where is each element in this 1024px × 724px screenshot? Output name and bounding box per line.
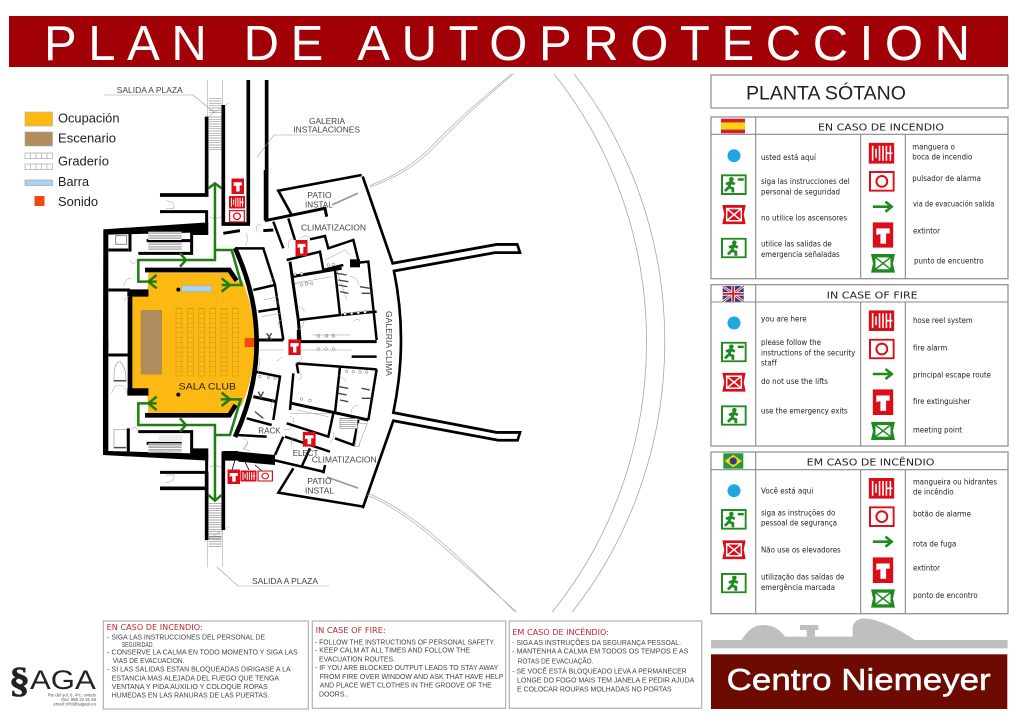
icon: hose reel <box>869 143 894 164</box>
panel: planta sótano: PLANTA SÓTANO <box>746 82 906 104</box>
icon: alarm <box>870 507 894 526</box>
label: patio instal south: PATIO <box>307 476 332 486</box>
body text: ESTANCIA MAS ALEJADA DEL FUEGO QUE TENGA <box>112 673 279 682</box>
body text: - FOLLOW THE INSTRUCTIONS OF PERSONAL SAFETY. <box>315 637 495 646</box>
body text: VENTANA Y PIDA AUXILIO Y COLOQUE ROPAS <box>112 682 268 691</box>
heading: IN CASE OF FIRE <box>827 290 918 301</box>
icon: meeting point <box>871 589 895 608</box>
icon: extinguisher <box>873 389 893 415</box>
body text: AND PLACE WET CLOTHES IN THE GROOVE OF THE <box>320 681 492 690</box>
west upper walls <box>103 80 273 350</box>
heading: EM CASO DE INCÊNDIO: <box>512 628 609 637</box>
stage <box>141 310 162 374</box>
fire equipment south <box>228 460 272 484</box>
auditorium: sala club <box>127 248 257 437</box>
legend text: de incêndio <box>913 488 954 497</box>
icon: meeting point <box>871 422 895 440</box>
legend text: extintor <box>913 563 941 572</box>
body text: - SIGA LAS INSTRUCCIONES DEL PERSONAL DE <box>107 633 265 642</box>
body text: ROTAS DE EVACUAÇÃO. <box>518 656 593 665</box>
legend text: punto de encuentro <box>914 256 984 265</box>
legend text: pessoal de segurança <box>761 519 837 528</box>
evacuation routes south <box>138 393 241 501</box>
body text <box>512 638 694 694</box>
legend text: instructions of the security <box>761 348 856 357</box>
arrowheads <box>148 183 230 292</box>
flag: uk <box>723 286 744 302</box>
fire equipment north <box>229 178 245 222</box>
label: climatizacion south: CLIMATIZACION <box>312 454 377 464</box>
logo: saga <box>9 660 97 707</box>
legend text: fire extinguisher <box>913 397 971 406</box>
legend text: siga as instruções do <box>761 508 836 517</box>
bar <box>182 286 212 292</box>
legend <box>25 112 120 209</box>
body text: SEGURIDAD. <box>122 640 154 649</box>
body text: FROM FIRE OVER WINDOW AND ASK THAT HAVE HELP <box>320 672 503 681</box>
icon: you are here <box>728 484 740 497</box>
logo: saga: tfno: 985 22 81 59 <box>61 697 97 702</box>
legend text: hose reel system <box>913 316 973 325</box>
extinguisher: north wing <box>296 240 308 256</box>
icon: hose reel <box>869 478 894 499</box>
legend text: principal escape route <box>913 370 991 379</box>
panel: english legend <box>711 285 1008 446</box>
west lower walls <box>103 340 275 567</box>
label: climatizacion north: CLIMATIZACION <box>301 223 366 233</box>
icon: niemeyer skyline <box>711 618 1008 648</box>
east lower rooms <box>237 330 377 507</box>
seating <box>176 308 238 376</box>
body text: EVACUATION ROUTES. <box>319 654 395 663</box>
label: galeria instalaciones: GALERIA <box>309 116 345 126</box>
icon: escape arrow <box>873 537 892 547</box>
evacuation routes north <box>138 183 242 292</box>
label: galeria instalaciones <box>293 116 360 135</box>
icon: meeting point <box>871 254 895 273</box>
legend text: manguera o <box>912 142 955 151</box>
legend text: usted está aquí <box>761 153 817 162</box>
panel: instructions english <box>312 621 506 708</box>
legend text <box>761 315 991 435</box>
occupied area <box>132 273 255 414</box>
body text: - SIGA AS INSTRUÇÕES DA SEGURANÇA PESSOAL. <box>512 638 681 647</box>
label: salida a plaza south: SALIDA A PLAZA <box>252 576 318 586</box>
body text: - CONSERVE LA CALMA EN TODO MOMENTO Y SIGA LAS <box>107 648 298 657</box>
heading: EN CASO DE INCENDIO: <box>107 623 203 632</box>
icon: escape arrow <box>873 202 892 212</box>
legend text: via de evacuación salida <box>913 200 994 209</box>
icon: security staff <box>722 175 746 194</box>
outer arcs <box>327 74 665 612</box>
legend text: use the emergency exits <box>761 407 848 416</box>
logo: centro niemeyer <box>711 654 1007 709</box>
logo: saga: email: info@sagaoi.eu <box>53 702 97 707</box>
legend text: personal de seguridad <box>761 187 840 196</box>
legend text: please follow the <box>761 338 821 347</box>
legend text: mangueira ou hidrantes <box>913 477 997 486</box>
heading: EN CASO DE INCENDIO <box>818 123 944 134</box>
legend text: extintor <box>913 226 941 235</box>
extinguisher: centre <box>288 339 301 355</box>
panel: planta sótano <box>711 75 1008 108</box>
icon: alarm <box>870 172 894 191</box>
body text: VIAS DE EVACUACION. <box>113 656 184 665</box>
legend text: staff <box>761 359 777 368</box>
legend text: emergencia señaladas <box>761 250 840 259</box>
label: sala club: SALA CLUB <box>179 381 236 392</box>
label: patio instal south: INSTAL <box>305 485 334 495</box>
flag: spain <box>721 119 745 133</box>
legend text: utilização das saídas de <box>761 573 845 582</box>
legend text <box>761 142 994 265</box>
logo: saga: AGA <box>30 665 96 695</box>
icon: emergency exit <box>722 574 746 592</box>
legend text: siga las instrucciones del <box>761 177 850 186</box>
icon: escape arrow <box>873 369 892 379</box>
legend text: Você está aqui <box>761 486 813 495</box>
icon: no lifts <box>722 540 746 559</box>
label: patio instal north: INSTAL <box>305 199 333 209</box>
legend text: fire alarm <box>913 343 947 352</box>
icon: you are here <box>728 149 740 162</box>
legend text: boca de incendio <box>912 153 973 162</box>
legend text: you are here <box>761 315 807 324</box>
icon: security staff <box>722 343 746 361</box>
body text <box>107 633 298 700</box>
legend text: meeting point <box>913 426 962 435</box>
icon: emergency exit <box>722 406 746 425</box>
body text: - SI LAS SALIDAS ESTAN BLOQUEADAS DIRIGASE A LA <box>107 665 291 674</box>
label: galeria instalaciones: INSTALACIONES <box>293 125 360 135</box>
legend: ocupación: Ocupación <box>58 112 120 126</box>
legend: sonido: Sonido <box>58 195 98 209</box>
legend: barra: Barra <box>58 175 89 189</box>
icon: you are here <box>728 316 740 330</box>
body text: - MANTENHA A CALMA EM TODOS OS TEMPOS E AS <box>512 647 688 656</box>
panel: spanish legend <box>711 117 1008 279</box>
body text: - KEEP CALM AT ALL TIMES AND FOLLOW THE <box>315 646 470 655</box>
panel: instructions spanish <box>103 621 308 709</box>
body text: - SE VOCÊ ESTÁ BLOQUEADO LEVA A PERMANECER <box>512 667 687 676</box>
label: elect: ELECT <box>293 448 318 458</box>
panel: instructions portuguese <box>509 621 702 708</box>
sound desk <box>245 338 255 347</box>
arrowheads <box>148 393 230 501</box>
east upper rooms <box>235 170 377 340</box>
extinguisher: south wing <box>303 432 316 447</box>
legend text: no utilice los ascensores <box>761 213 847 222</box>
legend text: Não use os elevadores <box>761 545 841 554</box>
body text: - IF YOU ARE BLOCKED OUTPUT LEADS TO STAY AWAY <box>315 663 498 672</box>
icon: no lifts <box>722 373 746 392</box>
body text: LONGE DO FOGO MAIS TEM JANELA E PEDIR AJUDA <box>517 676 694 685</box>
plan labels <box>104 85 394 586</box>
legend: escenario: Escenario <box>58 132 116 146</box>
icon: extinguisher <box>873 222 893 248</box>
label: patio instal south <box>305 476 334 495</box>
label: patio instal north: PATIO <box>307 190 332 200</box>
heading: IN CASE OF FIRE: <box>316 626 386 635</box>
icon: hose reel <box>869 310 894 331</box>
auditorium walls <box>130 270 237 415</box>
columns <box>176 288 180 397</box>
icon: emergency exit <box>722 239 746 257</box>
legend text <box>761 477 997 600</box>
heading: EM CASO DE INCÊNDIO <box>807 455 935 468</box>
body text <box>315 637 503 699</box>
icon: security staff <box>722 510 746 529</box>
flag: brazil <box>723 453 743 469</box>
body text: DOORS.. <box>319 690 348 699</box>
panel: portuguese legend <box>711 452 1008 614</box>
legend text: botão de alarme <box>913 510 971 519</box>
label: salida a plaza north: SALIDA A PLAZA <box>117 85 183 95</box>
legend text: rota de fuga <box>913 540 956 549</box>
legend text: pulsador de alarma <box>912 174 981 183</box>
legend text: do not use the lifts <box>761 377 828 386</box>
label: galeria clima: GALERIA CLIMA <box>384 311 394 376</box>
label: rack: RACK <box>258 425 281 435</box>
logo: saga: § <box>9 660 30 700</box>
logo: saga: Pte del sol, 6, 4ºc, oviedo <box>48 692 97 697</box>
body text: HUMEDAS EN LAS RANURAS DE LAS PUERTAS. <box>112 691 269 700</box>
floor plan <box>103 74 665 612</box>
label: patio instal north <box>305 190 333 209</box>
legend: graderío: Graderío <box>58 154 109 168</box>
icon: no lifts <box>722 205 746 224</box>
outer galleries and arcs <box>327 74 665 612</box>
icon: alarm <box>870 340 894 358</box>
legend text: ponto de encontro <box>913 591 978 600</box>
title banner: PLAN DE AUTOPROTECCION <box>44 17 970 71</box>
body text: E COLOCAR ROUPAS MOLHADAS NO PORTAS <box>517 685 672 694</box>
icon: extinguisher <box>873 557 893 583</box>
logo: centro niemeyer: Centro Niemeyer <box>727 662 991 697</box>
legend text: utilice las salidas de <box>761 240 832 249</box>
legend text: emergência marcada <box>761 583 835 592</box>
